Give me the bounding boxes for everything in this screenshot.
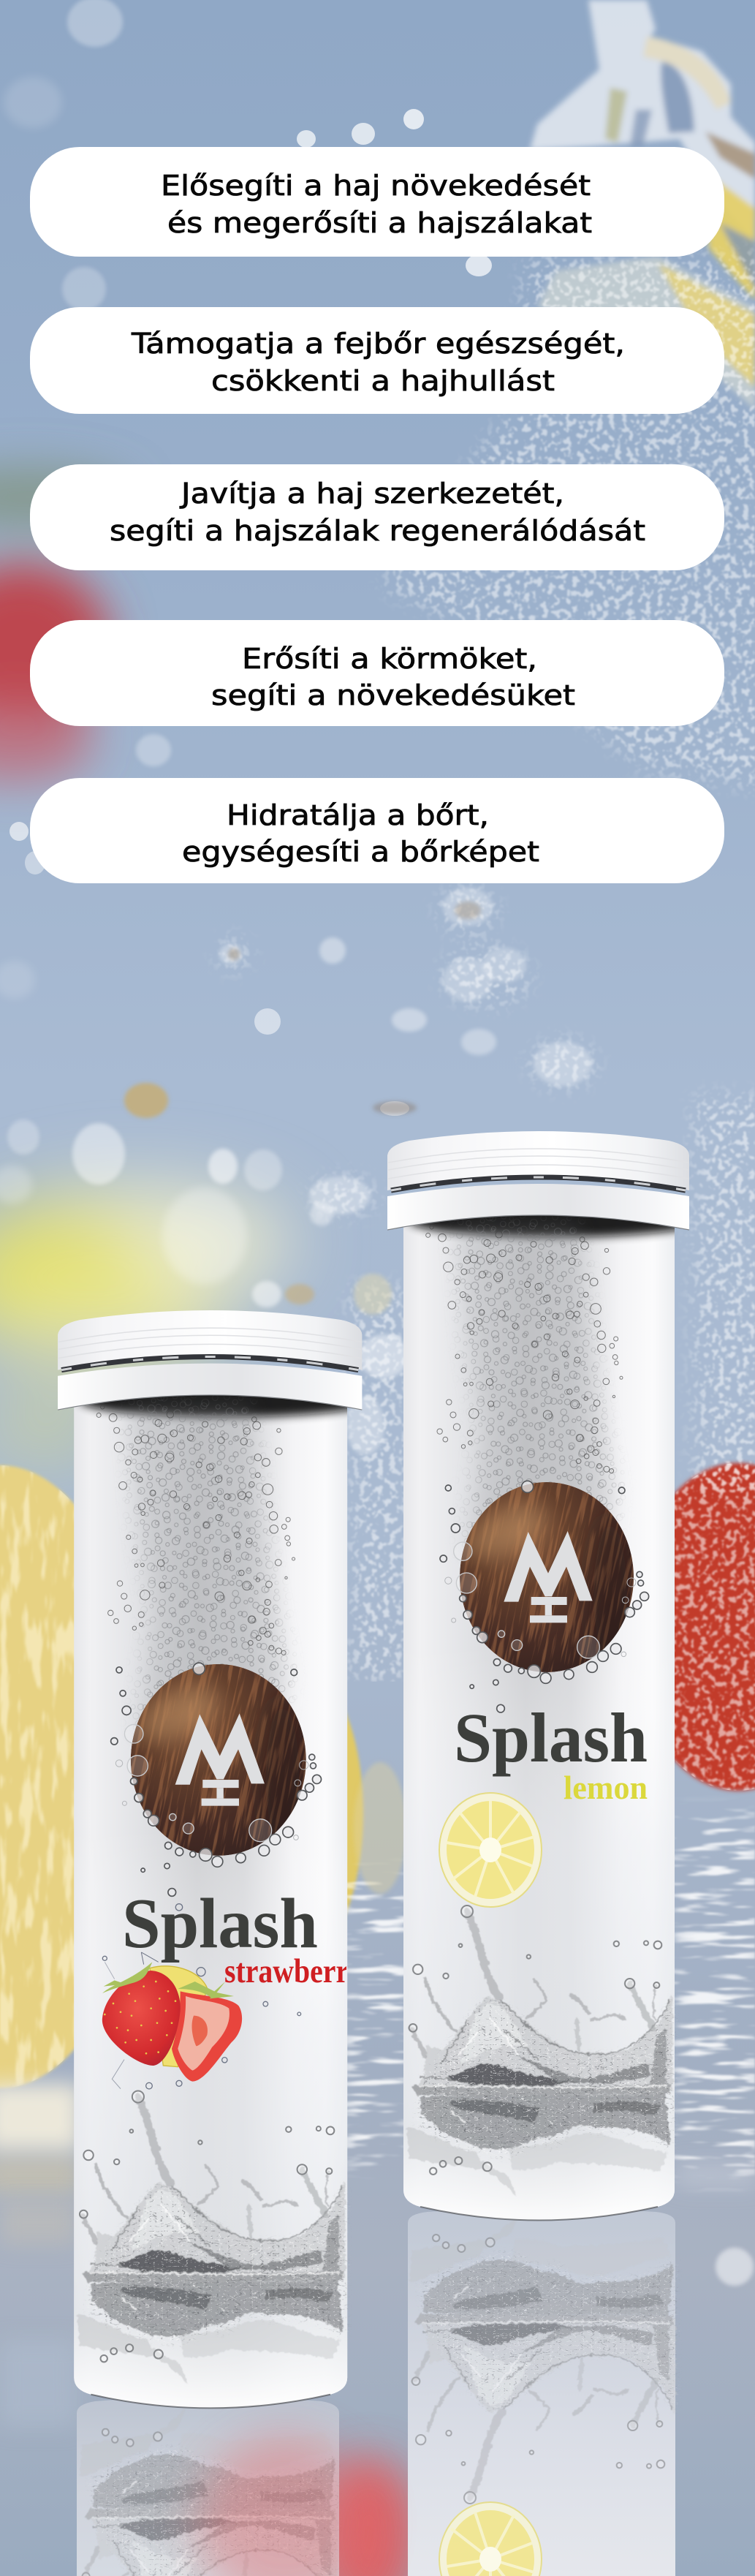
tube: lemon [382, 1131, 714, 2220]
water splash top right [530, 0, 755, 409]
yellow blurred glow, left [0, 1185, 292, 1455]
reflection: strawberry tube [75, 2397, 373, 2576]
benefit pill 1 [30, 147, 724, 257]
logo [504, 1531, 593, 1623]
flavour name: lemon [564, 1769, 648, 1806]
water splash [402, 1905, 680, 2196]
golden droplets [124, 902, 481, 1894]
red blurred reflection between tubes [318, 2457, 420, 2576]
benefit pill 5 [30, 778, 724, 883]
benefit text: csökkenti a hajhullást [211, 365, 555, 397]
big lemon, left [0, 1465, 153, 2088]
lemon edge between the tubes [221, 1660, 363, 1967]
tube: strawberry [52, 1310, 387, 2408]
benefit text: Támogatja a fejbőr egészségét, [131, 328, 625, 360]
benefit text: segíti a növekedésüket [211, 679, 575, 711]
product name: Splash [454, 1699, 648, 1777]
reflection: lemon tube [405, 2208, 683, 2576]
benefit text: Elősegíti a haj növekedését [161, 170, 591, 202]
icon: strawberries [102, 1962, 242, 2082]
benefit pill 4 [30, 620, 724, 726]
water surface band [0, 2164, 755, 2428]
benefit pill 3 [30, 464, 724, 570]
tube body [403, 1215, 675, 2221]
benefit text: segíti a hajszálak regenerálódását [110, 515, 645, 547]
benefit text: Erősíti a körmöket, [242, 643, 537, 675]
icon: lemon slice [439, 1793, 542, 1907]
ripples on water, lower right [347, 1809, 755, 2177]
tube body [74, 1395, 348, 2409]
hair circle [110, 1662, 322, 1897]
red blurred fruit, left [0, 468, 132, 782]
bubbles [403, 1214, 675, 1579]
cap [58, 1310, 362, 1410]
cap [387, 1131, 689, 1230]
red strawberry, right [675, 1459, 755, 1794]
water splash [72, 2090, 352, 2384]
benefit text: Javítja a haj szerkezetét, [180, 477, 564, 510]
product name: Splash [122, 1884, 318, 1963]
benefit text: Hidratálja a bőrt, [227, 799, 489, 831]
bubbles [74, 1394, 348, 1762]
benefit text: és megerősíti a hajszálakat [167, 207, 592, 239]
benefit text: egységesíti a bőrképet [182, 836, 539, 868]
water droplets near fruit [102, 1904, 301, 2089]
hair circle [439, 1480, 649, 1713]
benefit pill 2 [30, 307, 724, 414]
logo [175, 1713, 265, 1806]
water droplets, white speckle field [216, 246, 755, 1682]
